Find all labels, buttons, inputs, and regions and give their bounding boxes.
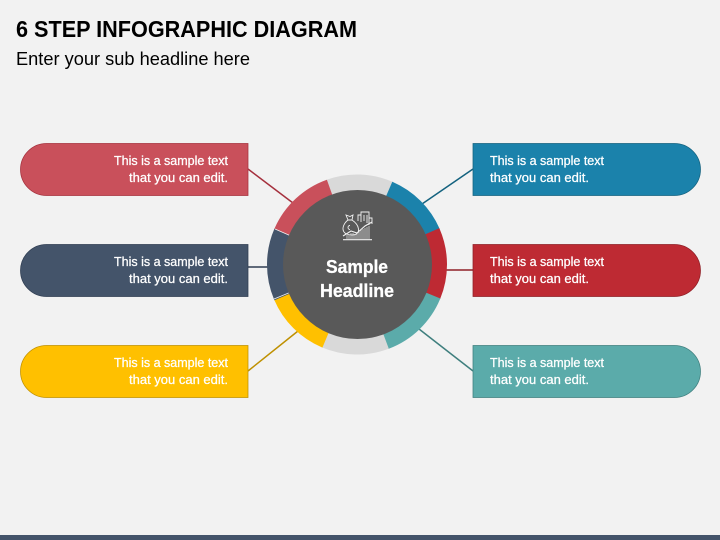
panel: right step 3 — [473, 346, 700, 398]
center circle — [283, 190, 432, 339]
subtitle: Enter your sub headline here — [16, 49, 250, 69]
panel: right step 2: This is a sample text — [490, 255, 605, 269]
footer bar — [0, 535, 720, 540]
connectors — [248, 169, 473, 371]
center headline: Headline — [320, 281, 394, 301]
panel: left step 2: that you can edit. — [129, 272, 228, 286]
panel: left step 2: This is a sample text — [114, 255, 229, 269]
panel: right step 3: that you can edit. — [490, 373, 589, 387]
panel: right step 2 — [473, 244, 700, 296]
center headline — [320, 257, 394, 301]
panel: right step 3: This is a sample text — [490, 356, 605, 370]
panel: right step 1: This is a sample text — [490, 154, 605, 168]
panel: right step 2: that you can edit. — [490, 272, 589, 286]
panel: left step 3 — [20, 346, 248, 398]
panel: left step 2 — [20, 244, 248, 296]
panel: left step 1: This is a sample text — [114, 154, 229, 168]
panel: left step 3: This is a sample text — [114, 356, 229, 370]
title: 6 STEP INFOGRAPHIC DIAGRAM — [16, 16, 357, 42]
segmented ring — [253, 160, 461, 369]
panel: right step 1 — [473, 144, 700, 196]
panel: left step 3: that you can edit. — [129, 373, 228, 387]
center headline: Sample — [326, 257, 388, 277]
icon: money bag, buildings and growth chart — [343, 212, 372, 240]
panel: right step 1: that you can edit. — [490, 171, 589, 185]
panel: left step 1: that you can edit. — [129, 171, 228, 185]
panel: left step 1 — [20, 144, 248, 196]
